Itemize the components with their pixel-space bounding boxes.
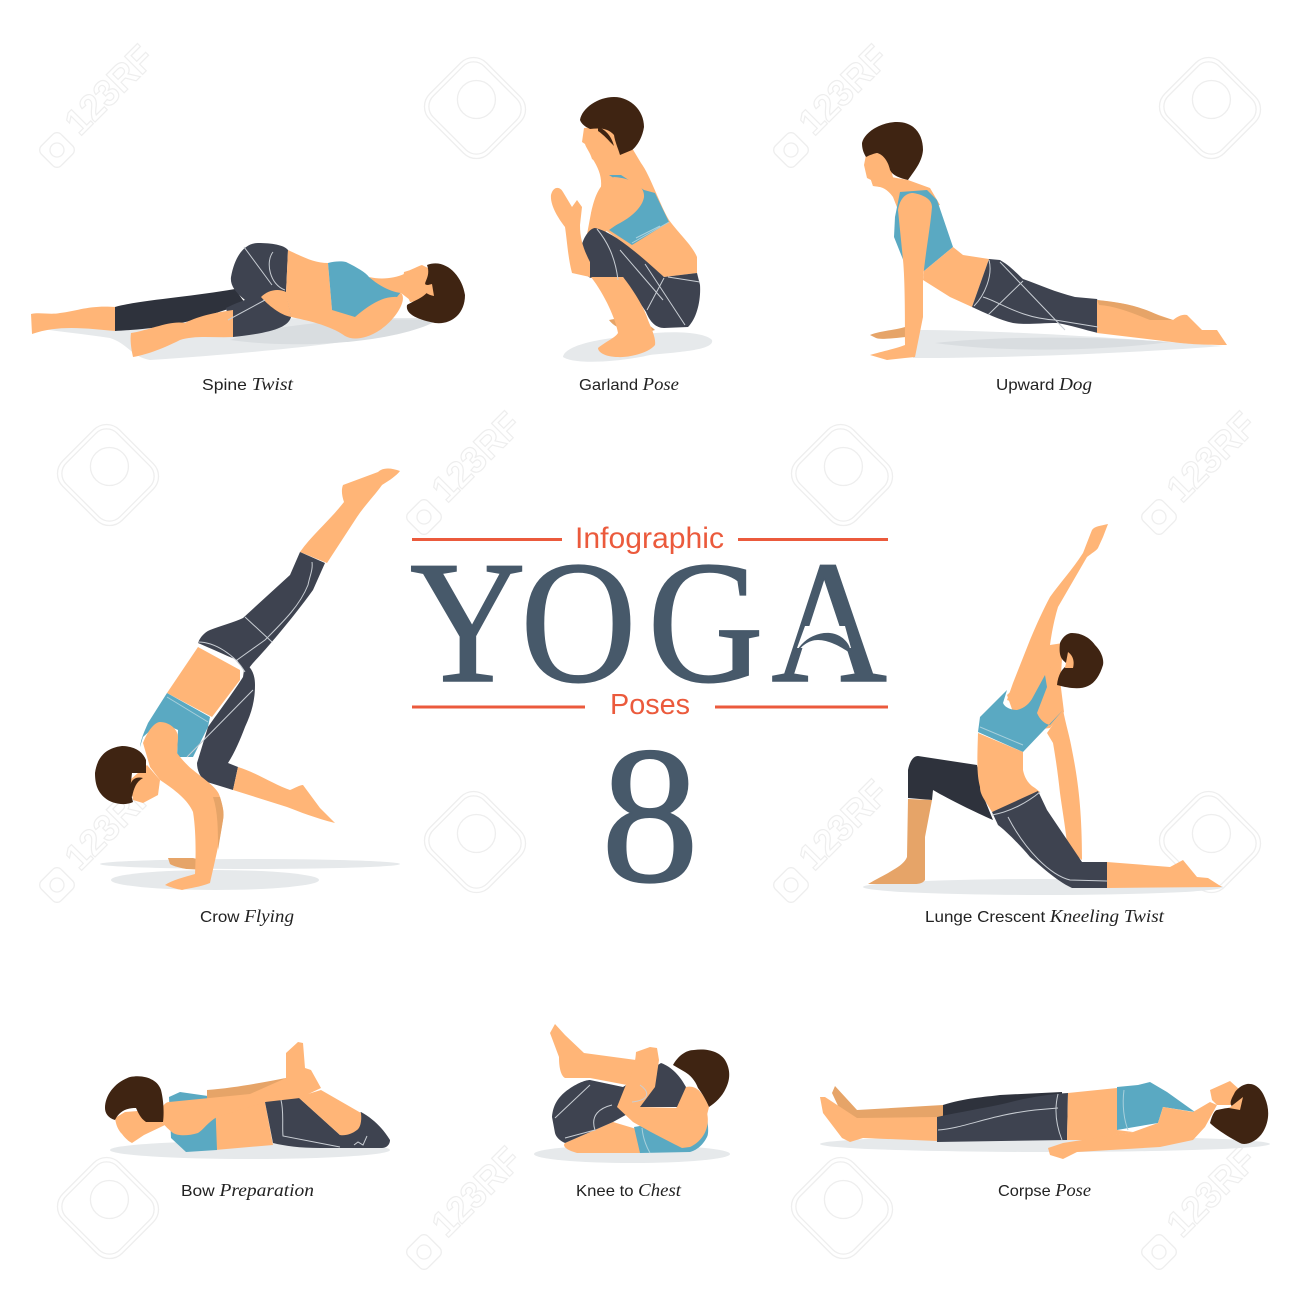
watermarks: 123RF (791, 37, 896, 143)
caption: Lunge Crescent Kneeling Twist: Lunge Crescent Kneeling Twist (925, 906, 1165, 926)
watermarks: 123RF (57, 37, 162, 143)
caption: Corpse Pose: Corpse Pose (998, 1180, 1091, 1200)
watermarks: 123RF (424, 404, 529, 510)
caption: Bow Preparation: Bow Preparation (181, 1180, 314, 1200)
watermarks: 123RF (1159, 1139, 1264, 1245)
watermarks: 123RF (1159, 404, 1264, 510)
caption: Knee to Chest: Knee to Chest (576, 1180, 682, 1200)
watermarks: 123RF (57, 772, 162, 878)
pose: Bow Preparation (105, 1042, 390, 1159)
pose: Corpse (820, 1081, 1270, 1159)
pose: Knee to Chest (534, 1024, 730, 1163)
watermarks: 123RF (791, 772, 896, 878)
title line: Infographic: Infographic (575, 522, 724, 555)
title line: Poses: Poses (610, 689, 690, 721)
caption: Upward Dog: Upward Dog (996, 374, 1092, 394)
A crossbar replacement: swoosh (795, 626, 851, 654)
caption: Garland Pose: Garland Pose (579, 374, 679, 394)
pose: Lunge Crescent (863, 524, 1223, 895)
pose: Crow Flying (95, 468, 400, 890)
pose: Garland (551, 97, 712, 362)
caption: Spine Twist: Spine Twist (202, 374, 294, 394)
title: YOGA: YOGA (410, 527, 887, 720)
caption: Crow Flying: Crow Flying (200, 906, 294, 926)
watermarks: 123RF (424, 1139, 529, 1245)
pose: Upward Dog (862, 122, 1227, 360)
title block (410, 522, 888, 924)
title: 8: 8 (601, 707, 699, 924)
pose: Spine Twist (31, 243, 465, 360)
